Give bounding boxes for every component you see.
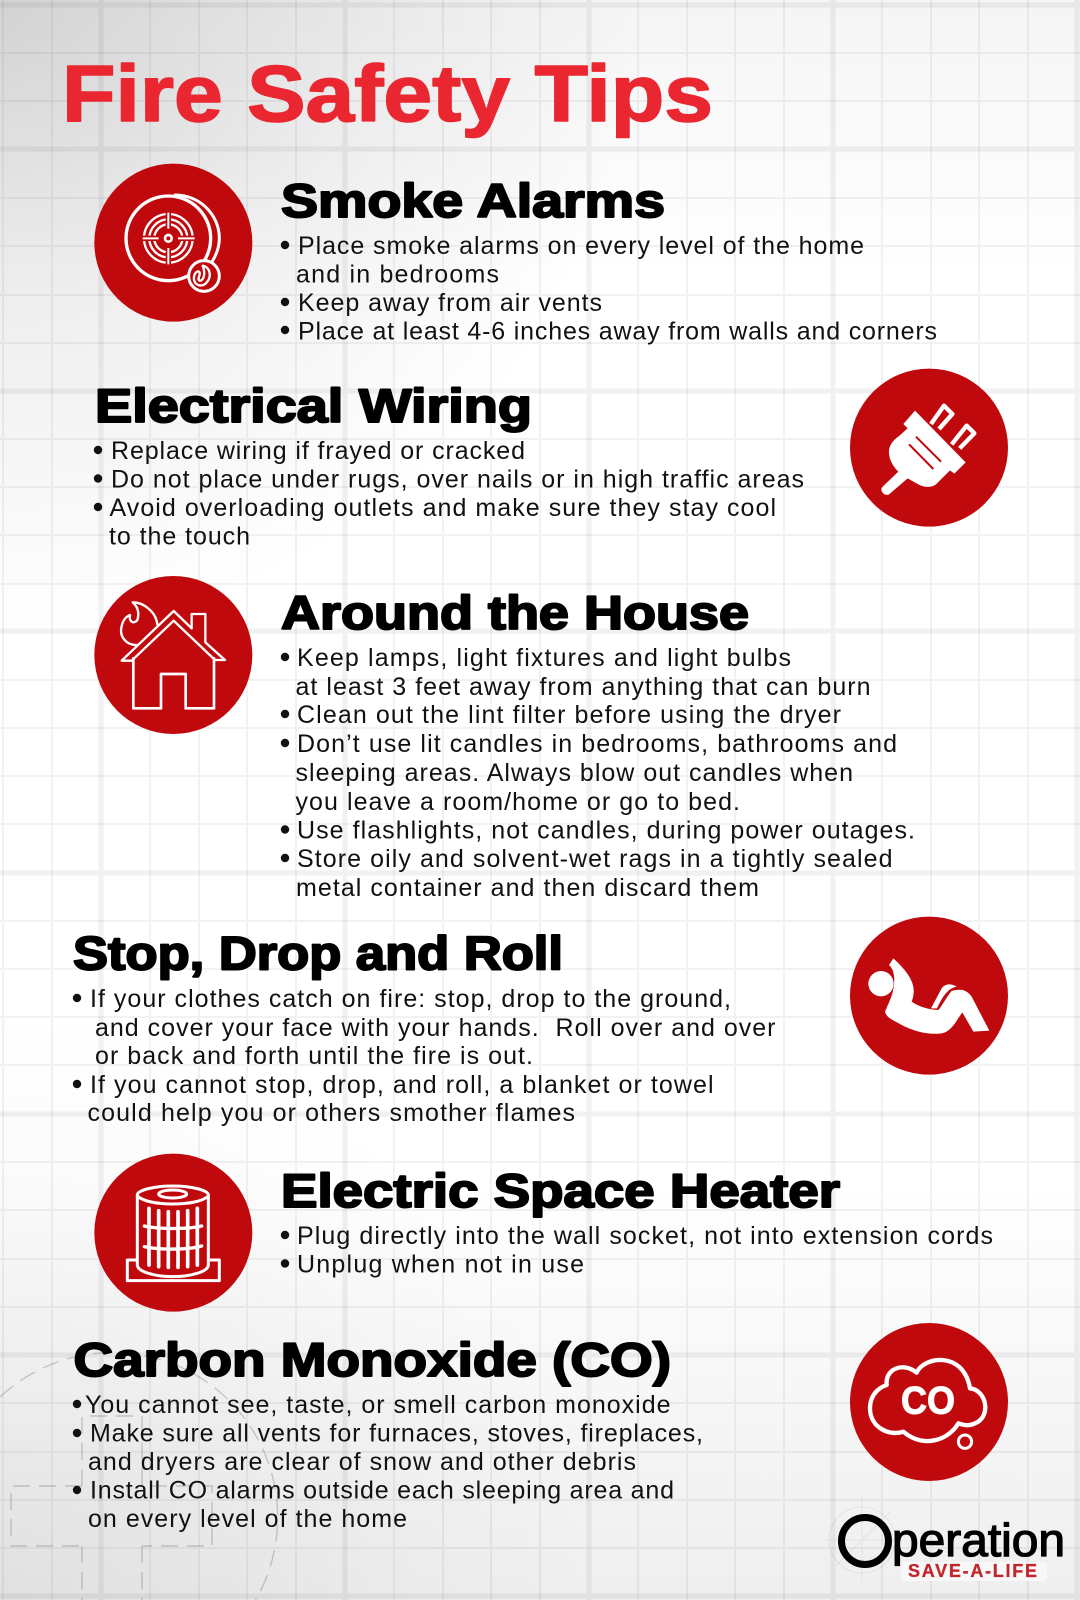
bullet list: stop drop and roll: and cover your face with your hands. Roll over and over — [95, 1014, 776, 1042]
panel: around the house — [94, 576, 915, 902]
panel: electric space heater — [94, 1154, 993, 1312]
bullet list: carbon monoxide: and dryers are clear of snow and other debris — [88, 1448, 636, 1476]
heading: electrical wiring: Electrical Wiring — [95, 379, 532, 432]
bullet list: stop drop and roll: If your clothes catch on fire: stop, drop to the ground, — [90, 985, 731, 1013]
heading: stop drop and roll: Stop, Drop and Roll — [73, 926, 563, 980]
bullet list: stop drop and roll: If you cannot stop, drop, and roll, a blanket or towel — [90, 1071, 714, 1099]
bullet list: smoke alarms — [281, 232, 937, 346]
bullet list: smoke alarms: and in bedrooms — [296, 260, 499, 288]
bullet list: stop drop and roll: could help you or others smother flames — [88, 1099, 575, 1127]
bullet list: carbon monoxide: on every level of the home — [88, 1505, 407, 1533]
icon: smoke alarm — [94, 164, 252, 322]
bullet list: electrical wiring — [94, 437, 804, 550]
bullet list: smoke alarms: Keep away from air vents — [298, 289, 602, 317]
bullet list: electrical wiring: Do not place under rugs, over nails or in high traffic areas — [111, 466, 804, 494]
bullet list: around the house: Store oily and solvent-wet rags in a tightly sealed — [297, 845, 892, 873]
bullet list: around the house: Keep lamps, light fixtures and light bulbs — [297, 644, 791, 672]
bullet list: electrical wiring: Avoid overloading outlets and make sure they stay cool — [110, 494, 776, 522]
title: Fire Safety Tips — [62, 49, 713, 138]
bullet list: around the house: Don’t use lit candles in bedrooms, bathrooms and — [297, 730, 897, 758]
bullet list: electric space heater: Unplug when not in use — [297, 1250, 584, 1278]
icon: plug — [850, 369, 1008, 527]
bullet list: stop drop and roll — [73, 985, 776, 1127]
bullet list: around the house: at least 3 feet away from anything that can burn — [296, 673, 870, 701]
logo: operation save-a-life: SAVE-A-LIFE — [908, 1561, 1037, 1581]
bullet list: electric space heater — [281, 1222, 993, 1278]
panel: smoke alarms — [94, 164, 937, 346]
panel: stop drop and roll — [73, 917, 1008, 1127]
bullet list: carbon monoxide: You cannot see, taste, or smell carbon monoxide — [85, 1391, 670, 1419]
icon: co cloud: CO — [901, 1380, 955, 1423]
bullet list: electric space heater: Plug directly into the wall socket, not into extension cords — [297, 1222, 993, 1250]
bullet list: carbon monoxide: Install CO alarms outside each sleeping area and — [90, 1476, 674, 1504]
bullet list: smoke alarms: Place at least 4-6 inches away from walls and corners — [298, 318, 937, 346]
bullet list: around the house: Clean out the lint filter before using the dryer — [297, 701, 841, 729]
icon: house on fire — [94, 576, 252, 734]
bullet list: around the house: sleeping areas. Always blow out candles when — [296, 759, 853, 787]
bullet list: around the house: metal container and then discard them — [296, 874, 759, 902]
bullet list: carbon monoxide: Make sure all vents for furnaces, stoves, fireplaces, — [90, 1420, 703, 1448]
heading: electric space heater: Electric Space Heater — [281, 1164, 840, 1217]
icon: space heater — [94, 1154, 252, 1312]
bullet list: electrical wiring: Replace wiring if frayed or cracked — [111, 437, 525, 465]
bullet list: electrical wiring: to the touch — [109, 522, 250, 550]
bullet list: smoke alarms: Place smoke alarms on every level of the home — [298, 232, 864, 260]
bullet list: carbon monoxide — [73, 1391, 703, 1533]
heading: around the house: Around the House — [281, 586, 749, 639]
logo: operation save-a-life — [842, 1514, 1065, 1581]
panel: carbon monoxide — [73, 1323, 1008, 1533]
panel: electrical wiring — [94, 369, 1008, 550]
icon: person rolling — [850, 917, 1008, 1075]
bullet list: around the house: you leave a room/home or go to bed. — [296, 788, 740, 816]
heading: smoke alarms: Smoke Alarms — [281, 174, 665, 227]
bullet list: stop drop and roll: or back and forth until the fire is out. — [95, 1042, 533, 1070]
icon: co cloud — [850, 1323, 1008, 1481]
logo: operation save-a-life: peration — [892, 1514, 1065, 1566]
heading: carbon monoxide: Carbon Monoxide (CO) — [74, 1333, 671, 1386]
bullet list: around the house — [281, 644, 915, 902]
bullet list: around the house: Use flashlights, not candles, during power outages. — [297, 816, 915, 844]
